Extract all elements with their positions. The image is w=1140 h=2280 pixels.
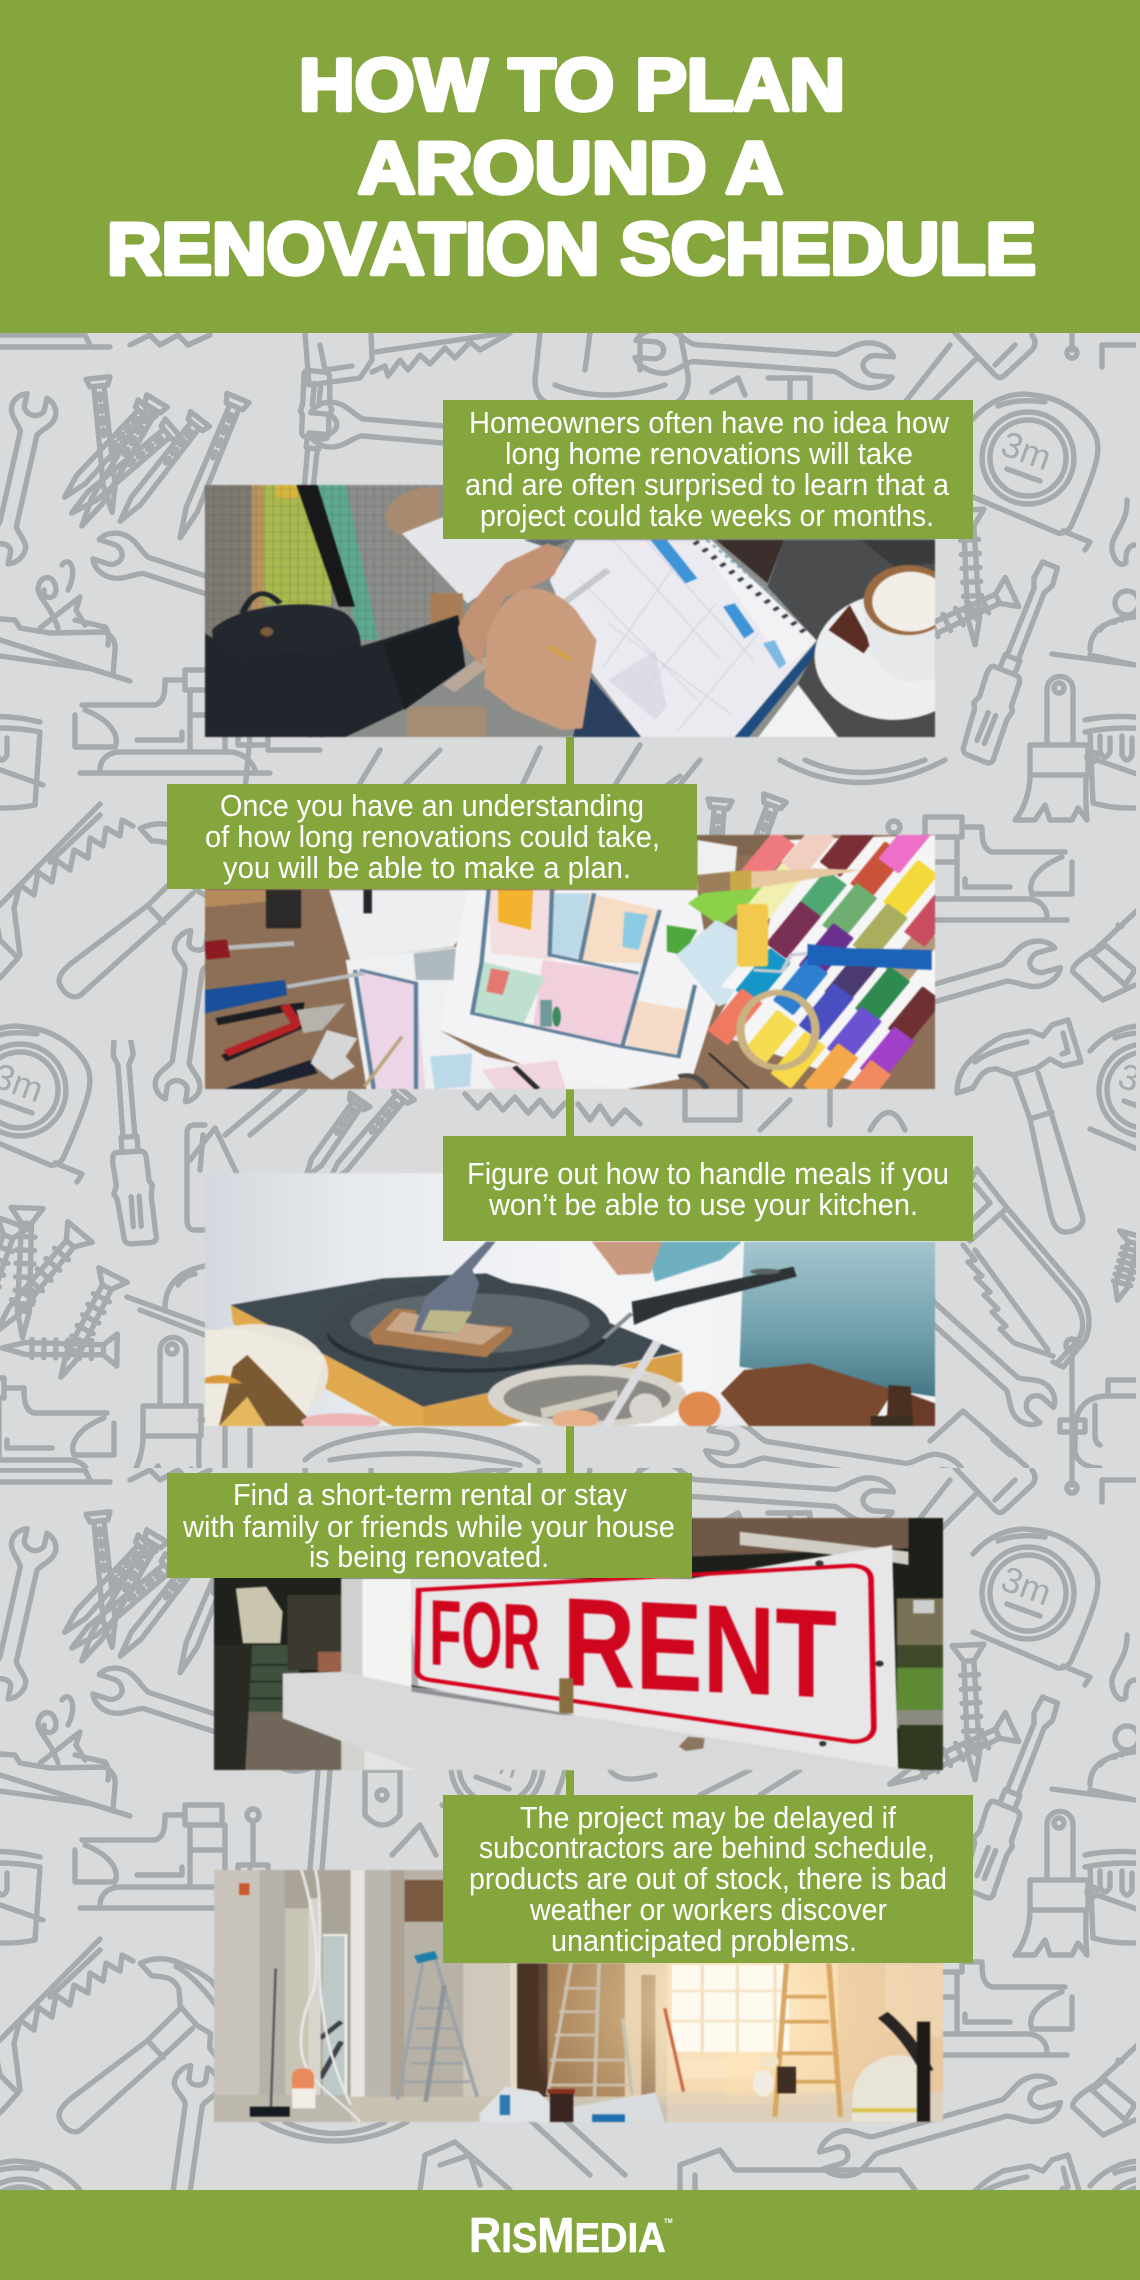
panel: step 4 rental <box>167 1473 944 1771</box>
callout: step 2: of how long renovations could take, <box>205 819 660 854</box>
callout: step 2: you will be able to make a plan. <box>223 850 631 885</box>
photo: floor plans, tools and paint swatches <box>204 834 936 1090</box>
callout: step 5 <box>443 1795 973 1963</box>
footer banner <box>0 2190 1140 2280</box>
callout: step 5: unanticipated problems. <box>551 1923 857 1958</box>
callout: step 5: products are out of stock, there is bad <box>469 1861 947 1896</box>
callout: step 1: and are often surprised to learn that a <box>465 467 950 502</box>
callout: step 5: weather or workers discover <box>529 1892 887 1927</box>
photo: for rent sign on a white post: FOR <box>429 1581 540 1691</box>
photo: hands marking a desk calendar <box>204 484 936 738</box>
callout: step 4 <box>167 1473 692 1578</box>
panel: step 3 meals <box>204 1136 973 1427</box>
title <box>107 45 1036 290</box>
title: RENOVATION SCHEDULE <box>107 209 1036 290</box>
callout: step 5: The project may be delayed if <box>520 1800 896 1835</box>
callout: step 2 <box>167 784 697 889</box>
callout: step 3 <box>443 1136 973 1241</box>
callout: step 4: is being renovated. <box>309 1539 549 1574</box>
photo: for rent sign on a white post: RENT <box>563 1572 837 1726</box>
title: AROUND A <box>358 128 783 209</box>
header banner <box>0 0 1140 333</box>
callout: step 2: Once you have an understanding <box>220 788 644 823</box>
title: HOW TO PLAN <box>299 45 845 126</box>
panel: step 1 calendar <box>204 400 973 738</box>
callout: step 5: subcontractors are behind schedule, <box>479 1830 935 1865</box>
callout: step 1: project could take weeks or months. <box>480 498 934 533</box>
callout: step 4: with family or friends while your house <box>182 1509 675 1544</box>
connector line 3 <box>566 1426 574 1473</box>
panel: step 5 delays <box>214 1795 973 2123</box>
panel: step 2 floor plan <box>167 784 936 1090</box>
callout: step 1: Homeowners often have no idea how <box>469 405 950 440</box>
callout: step 3: Figure out how to handle meals if you <box>467 1156 949 1191</box>
callout: step 3: won’t be able to use your kitchen. <box>488 1187 918 1222</box>
logo: RISMedia: TM <box>664 2219 673 2225</box>
connector line 1 <box>566 737 574 784</box>
connector line 2 <box>566 1089 574 1136</box>
connector line 4 <box>566 1770 574 1795</box>
photo: for rent sign on a white post <box>213 1517 944 1771</box>
callout: step 4: Find a short-term rental or stay <box>233 1477 627 1512</box>
photo: toast in a frying pan on a portable burner <box>204 1172 936 1427</box>
photo: house interior under construction with ladders <box>214 1869 944 2123</box>
callout: step 1 <box>443 400 973 539</box>
callout: step 1: long home renovations will take <box>505 436 913 471</box>
